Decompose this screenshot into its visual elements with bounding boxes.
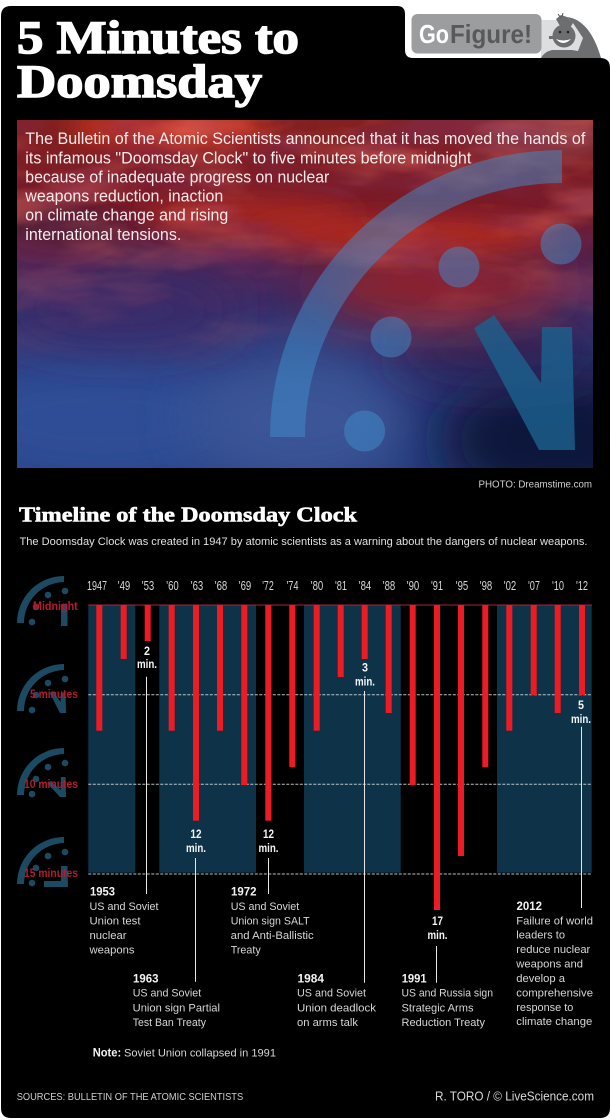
panel: sky photo with clock [17, 120, 593, 468]
annotation: 1963: Union sign Partial [133, 1003, 220, 1015]
annotation: 2012: reduce nuclear [516, 944, 591, 956]
clock hands [474, 315, 575, 450]
intro text [24, 130, 586, 244]
annotation: 2012: 2012 [516, 901, 542, 913]
annotation: 1953: nuclear [90, 930, 127, 942]
minute callouts: min. [137, 657, 157, 671]
year labels: '80 [311, 578, 323, 593]
year labels: '53 [142, 578, 154, 593]
timeline description: The Doomsday Clock was created in 1947 by atomic scientists as a warning about the dangers of nuclear weapons. [20, 536, 588, 548]
clock arc [270, 150, 562, 437]
annotation: 1991 [402, 973, 493, 1029]
annotation: 1963: Test Ban Treaty [133, 1017, 206, 1029]
intro text: international tensions. [25, 226, 181, 244]
axis labels: 10 minutes [24, 777, 78, 791]
annotation: 2012: comprehensive [516, 988, 593, 1000]
intro text: on climate change and rising [25, 207, 228, 225]
year labels: '07 [528, 578, 540, 593]
red bars [96, 605, 585, 910]
annotation: 1972: and Anti-Ballistic [231, 930, 314, 942]
annotation: 1953: weapons [88, 944, 135, 956]
icon: clock at 5 minutes [17, 664, 68, 713]
cloud texture [17, 120, 593, 352]
annotation: 2012 [515, 901, 593, 1028]
photo credit: PHOTO: Dreamstime.com [478, 478, 592, 490]
annotation: 1984: 1984 [298, 973, 325, 985]
annotation: 2012: climate change [516, 1016, 592, 1028]
annotation: 1972: 1972 [231, 887, 256, 899]
year labels: '12 [576, 578, 588, 593]
clock dots [344, 224, 582, 452]
chart: timeline of clock settings [24, 578, 592, 983]
annotation: 1972: US and Soviet [231, 901, 299, 913]
GoFigure logo: Figure! [450, 19, 532, 49]
year labels: '10 [552, 578, 564, 593]
year labels: '88 [383, 578, 395, 593]
year labels: '90 [407, 578, 419, 593]
minute callouts: 12 [263, 827, 274, 841]
annotation: 1991: US and Russia sign [402, 988, 493, 1000]
minute callouts: 12 [190, 827, 202, 841]
annotation: 1972: Union sign SALT [231, 916, 310, 928]
axis labels: Midnight [33, 599, 78, 613]
icon: clock at 15 minutes [17, 837, 68, 887]
year labels: '81 [335, 578, 347, 593]
minute callouts: min. [571, 712, 591, 726]
year labels: '72 [262, 578, 274, 593]
annotation: 1953: US and Soviet [90, 901, 158, 913]
intro text: because of inadequate progress on nuclear [25, 169, 330, 187]
intro text: The Bulletin of the Atomic Scientists announced that it has moved the hands of [25, 130, 586, 148]
annotation: 2012: Failure of world [516, 915, 593, 927]
annotation: 1953: 1953 [90, 887, 115, 899]
annotation: 1991: Strategic Arms [402, 1003, 474, 1015]
annotation: 2012: develop a [516, 973, 566, 985]
annotation: 1972: Treaty [231, 944, 261, 956]
year labels: '60 [166, 578, 179, 593]
title: 5 Minutes to [17, 12, 299, 64]
annotation: 2012: leaders to [516, 930, 565, 942]
axis labels: 15 minutes [24, 866, 78, 880]
intro text: its infamous "Doomsday Clock" to five minutes before midnight [25, 149, 472, 167]
GoFigure logo [412, 13, 601, 58]
minute callouts [137, 644, 591, 942]
year labels [87, 578, 588, 593]
minute gridlines [88, 695, 592, 874]
minute callouts: 5 [578, 698, 584, 712]
axis labels: 5 minutes [30, 687, 78, 701]
minute callouts: min. [355, 675, 375, 689]
annotation: 1984: on arms talk [297, 1017, 358, 1029]
year labels: '91 [431, 578, 443, 593]
note: Soviet Union collapsed in 1991 [124, 1048, 276, 1060]
note: Note: [93, 1048, 121, 1060]
minute callouts: min. [428, 928, 448, 942]
axis labels [24, 599, 78, 880]
year labels: '95 [456, 578, 468, 593]
annotation: 1972 [231, 887, 314, 956]
minute callouts: min. [258, 841, 278, 855]
photo colour masses [17, 120, 593, 468]
annotation: 1953: Union test [90, 916, 140, 928]
era panels: blue backgrounds [88, 605, 592, 873]
minute callouts: 3 [362, 661, 368, 675]
intro text: weapons reduction, inaction [24, 188, 223, 206]
midnight line [88, 604, 592, 606]
year labels: '02 [504, 578, 516, 593]
credit: R. TORO / © LiveScience.com [435, 1090, 594, 1104]
annotation: 1984 [297, 973, 377, 1029]
title [17, 12, 299, 108]
minute callouts: min. [186, 841, 206, 855]
icon: cartoon figure scratching head [541, 13, 601, 58]
year labels: 1947 [87, 578, 107, 593]
title: Doomsday [17, 56, 263, 108]
annotation: 2012: response to [516, 1002, 573, 1014]
icon: clock at 10 minutes [17, 748, 68, 797]
annotation: 1953 [88, 887, 158, 956]
leader lines [146, 677, 582, 983]
annotation: 1991: Reduction Treaty [402, 1017, 486, 1029]
timeline heading: Timeline of the Doomsday Clock [19, 503, 357, 527]
annotation: 1984: US and Soviet [297, 988, 366, 1000]
year labels: '49 [118, 578, 130, 593]
annotation: 2012: weapons and [515, 958, 583, 970]
minute callouts: 2 [144, 644, 150, 658]
annotation: 1984: Union deadlock [297, 1003, 377, 1015]
annotation: 1963: US and Soviet [133, 988, 201, 1000]
year labels: '63 [191, 578, 203, 593]
annotation: 1963 [133, 973, 220, 1029]
annotation: 1963: 1963 [133, 973, 158, 985]
year labels: '74 [286, 578, 298, 593]
icon: clock at midnight [17, 576, 68, 626]
minute callouts: 17 [432, 914, 443, 928]
annotation: 1991: 1991 [402, 973, 427, 985]
sources: SOURCES: BULLETIN OF THE ATOMIC SCIENTISTS [17, 1091, 243, 1103]
year labels: '69 [239, 578, 251, 593]
year labels: '84 [359, 578, 371, 593]
year labels: '98 [480, 578, 492, 593]
year labels: '68 [215, 578, 227, 593]
GoFigure logo: Go [419, 19, 449, 49]
